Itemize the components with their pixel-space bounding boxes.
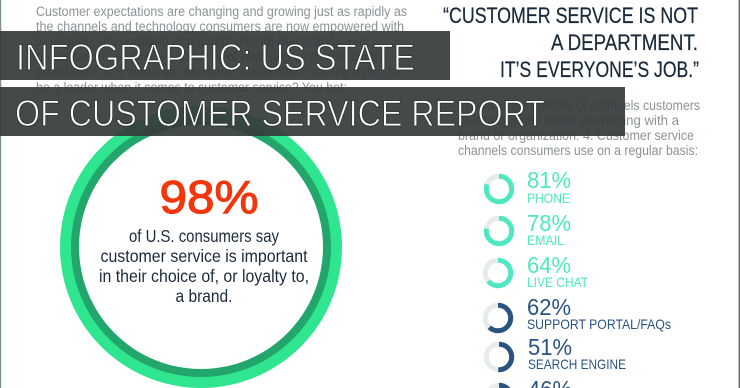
channel: live chat 64%	[485, 252, 588, 290]
pull quote: A DEPARTMENT.	[551, 30, 698, 55]
intro paragraph: the channels and technology consumers are now empowered with	[36, 19, 404, 34]
channels paragraph	[458, 98, 700, 158]
intro paragraph: adaptation. Is it worth the investment and effort to keep trying to	[36, 64, 399, 79]
intro paragraph: organizations embrace a strategy of non-stop customer-centric	[36, 49, 388, 64]
channel: email 78%: EMAIL	[527, 232, 564, 248]
channel: support portal 62%: SUPPORT PORTAL/FAQs	[527, 316, 671, 332]
stat circle: 98%	[60, 106, 342, 388]
channel: phone 81%: PHONE	[527, 190, 570, 206]
channel: live chat 64%: 64%	[527, 252, 571, 278]
channels paragraph: The average number of channels customers	[458, 98, 700, 113]
intro paragraph: Customer expectations are changing and growing just as rapidly as	[36, 4, 407, 19]
pull quote	[443, 3, 699, 82]
channel: email 78%	[486, 210, 571, 248]
channels paragraph: use frequently when interacting with a	[458, 113, 679, 128]
banner line 1: INFOGRAPHIC: US STATE	[16, 37, 415, 78]
stat description	[99, 226, 309, 306]
channel: live chat 64%: LIVE CHAT	[527, 274, 588, 290]
channel: search engine 51%: 51%	[528, 334, 572, 360]
intro paragraph: to engage, encouraging (if not demanding) that brands and	[36, 34, 366, 49]
stat number: 98%	[160, 171, 258, 223]
channel: support portal 62%: 62%	[527, 294, 571, 320]
channels paragraph: channels consumers use on a regular basis:	[458, 143, 698, 158]
title banner	[0, 31, 625, 136]
channel: search engine 51%: SEARCH ENGINE	[528, 356, 626, 372]
channel: search engine 51%	[486, 334, 626, 372]
channel: phone 81%: 81%	[527, 167, 571, 193]
channel: phone 81%	[486, 167, 571, 206]
channels paragraph: brand or organization: 4. Customer service	[458, 128, 694, 143]
banner line 2: OF CUSTOMER SERVICE REPORT	[15, 93, 545, 134]
channel: partially visible 46%	[488, 376, 572, 388]
stat description: of U.S. consumers say	[129, 226, 279, 246]
channel: support portal 62%	[485, 294, 671, 332]
channel: email 78%: 78%	[527, 210, 571, 236]
stat description: customer service is important	[100, 246, 308, 266]
stat description: a brand.	[176, 286, 232, 306]
intro paragraph: be a leader when it comes to customer service? You bet:	[36, 80, 347, 95]
intro paragraph	[36, 4, 407, 95]
stat description: in their choice of, or loyalty to,	[99, 266, 309, 286]
